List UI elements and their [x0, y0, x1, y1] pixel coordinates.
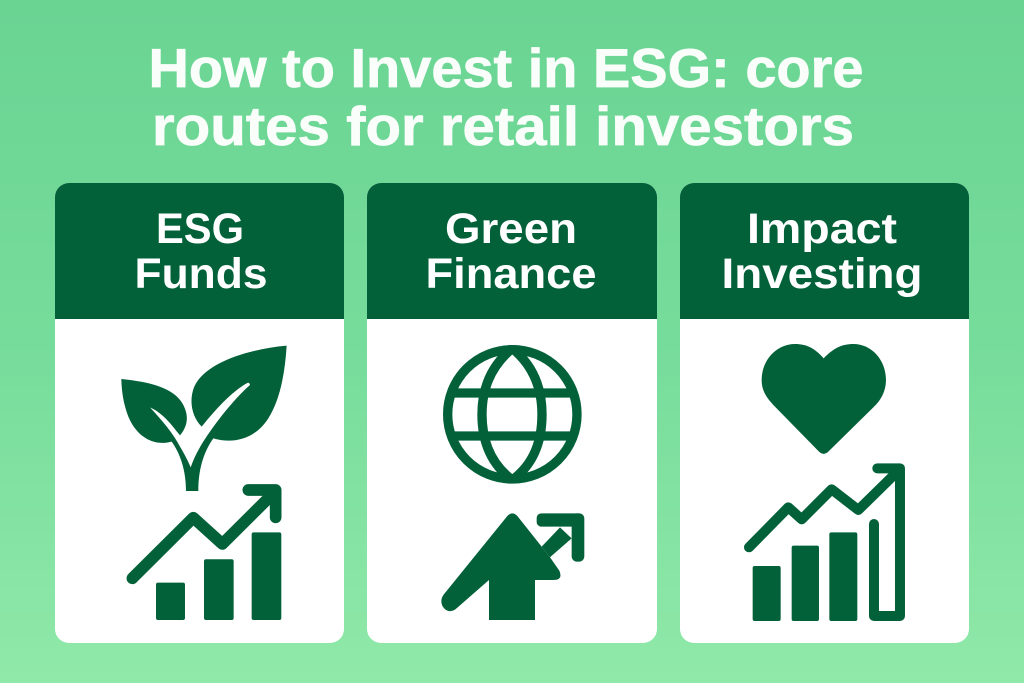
- icon: bar chart with arrow: [749, 468, 900, 621]
- panel: ESG Funds: [55, 183, 344, 643]
- title: How to Invest in ESG: core: [148, 37, 864, 99]
- heading: ESG Funds: Funds: [134, 250, 268, 298]
- panel: Impact Investing: [680, 183, 969, 643]
- icon: house with rising arrow: [441, 513, 584, 620]
- heading: Green Finance: Green: [445, 205, 577, 253]
- heading: Impact Investing: Investing: [722, 250, 922, 298]
- panel header: ESG Funds: [55, 183, 344, 319]
- icon: heart: [762, 344, 886, 454]
- panel header: Green Finance: [367, 183, 657, 319]
- heading: Green Finance: Finance: [426, 250, 596, 298]
- heading: ESG Funds: ESG: [156, 205, 244, 253]
- icon: globe: [448, 348, 577, 480]
- panel header: Impact Investing: [680, 183, 969, 319]
- heading: Impact Investing: [722, 205, 922, 298]
- title: routes for retail investors: [152, 95, 854, 157]
- icon: seedling: [121, 346, 287, 491]
- panel: Green Finance: [367, 183, 657, 643]
- heading: Green Finance: [426, 205, 596, 298]
- heading: ESG Funds: [134, 205, 268, 298]
- heading: Impact Investing: Impact: [747, 205, 897, 253]
- title: [148, 37, 864, 157]
- icon: bar chart with rising arrow: [132, 490, 281, 620]
